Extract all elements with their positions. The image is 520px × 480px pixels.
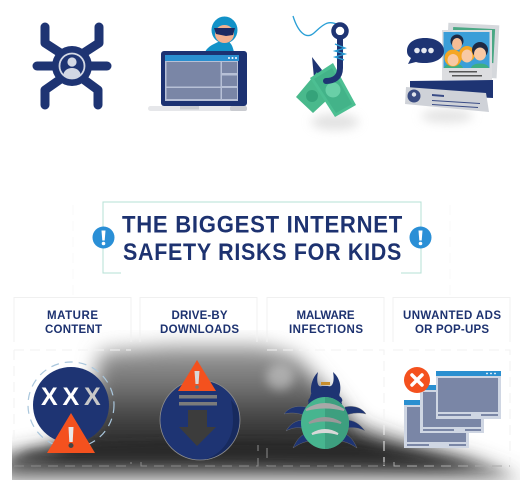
icon: drive-by download warning bbox=[160, 360, 240, 460]
title text bbox=[122, 212, 403, 266]
icon: family photos, chat bubble and profile cards bbox=[405, 23, 499, 123]
icon: malware bug bbox=[284, 372, 366, 449]
label: malware infections: MALWARE bbox=[296, 310, 355, 322]
title text: THE BIGGEST INTERNET bbox=[122, 212, 403, 238]
label: drive-by downloads: DOWNLOADS bbox=[160, 324, 239, 336]
title text: SAFETY RISKS FOR KIDS bbox=[123, 239, 402, 266]
label: mature content: CONTENT bbox=[45, 324, 102, 336]
icon: spider web account bbox=[37, 27, 107, 105]
icon: alert right bbox=[410, 226, 432, 248]
icon: pop-up windows with close button bbox=[404, 367, 501, 448]
label: mature content bbox=[14, 298, 131, 342]
window back-left bbox=[404, 400, 469, 448]
label: unwanted ads or pop-ups bbox=[393, 298, 510, 342]
icon: phishing hook with money bbox=[293, 16, 359, 130]
label: mature content: MATURE bbox=[47, 310, 98, 322]
label: unwanted ads or pop-ups: OR POP-UPS bbox=[415, 324, 489, 336]
label: malware infections bbox=[267, 298, 384, 342]
label: unwanted ads or pop-ups: UNWANTED ADS bbox=[403, 310, 501, 322]
title panel bbox=[92, 202, 432, 273]
window front bbox=[436, 371, 501, 419]
label: drive-by downloads: DRIVE-BY bbox=[172, 310, 228, 322]
icon: xxx mature content warning: X bbox=[41, 383, 58, 411]
label: malware infections: INFECTIONS bbox=[289, 324, 363, 336]
icon: alert left bbox=[92, 226, 114, 248]
smoke cloud bbox=[0, 346, 520, 480]
icon: xxx mature content warning: X bbox=[62, 383, 80, 411]
icon: hacker behind laptop bbox=[148, 16, 247, 111]
window middle bbox=[420, 385, 484, 433]
icon: xxx mature content warning: X bbox=[84, 383, 101, 411]
label: drive-by downloads bbox=[140, 298, 257, 342]
icon: xxx mature content warning bbox=[28, 362, 114, 453]
